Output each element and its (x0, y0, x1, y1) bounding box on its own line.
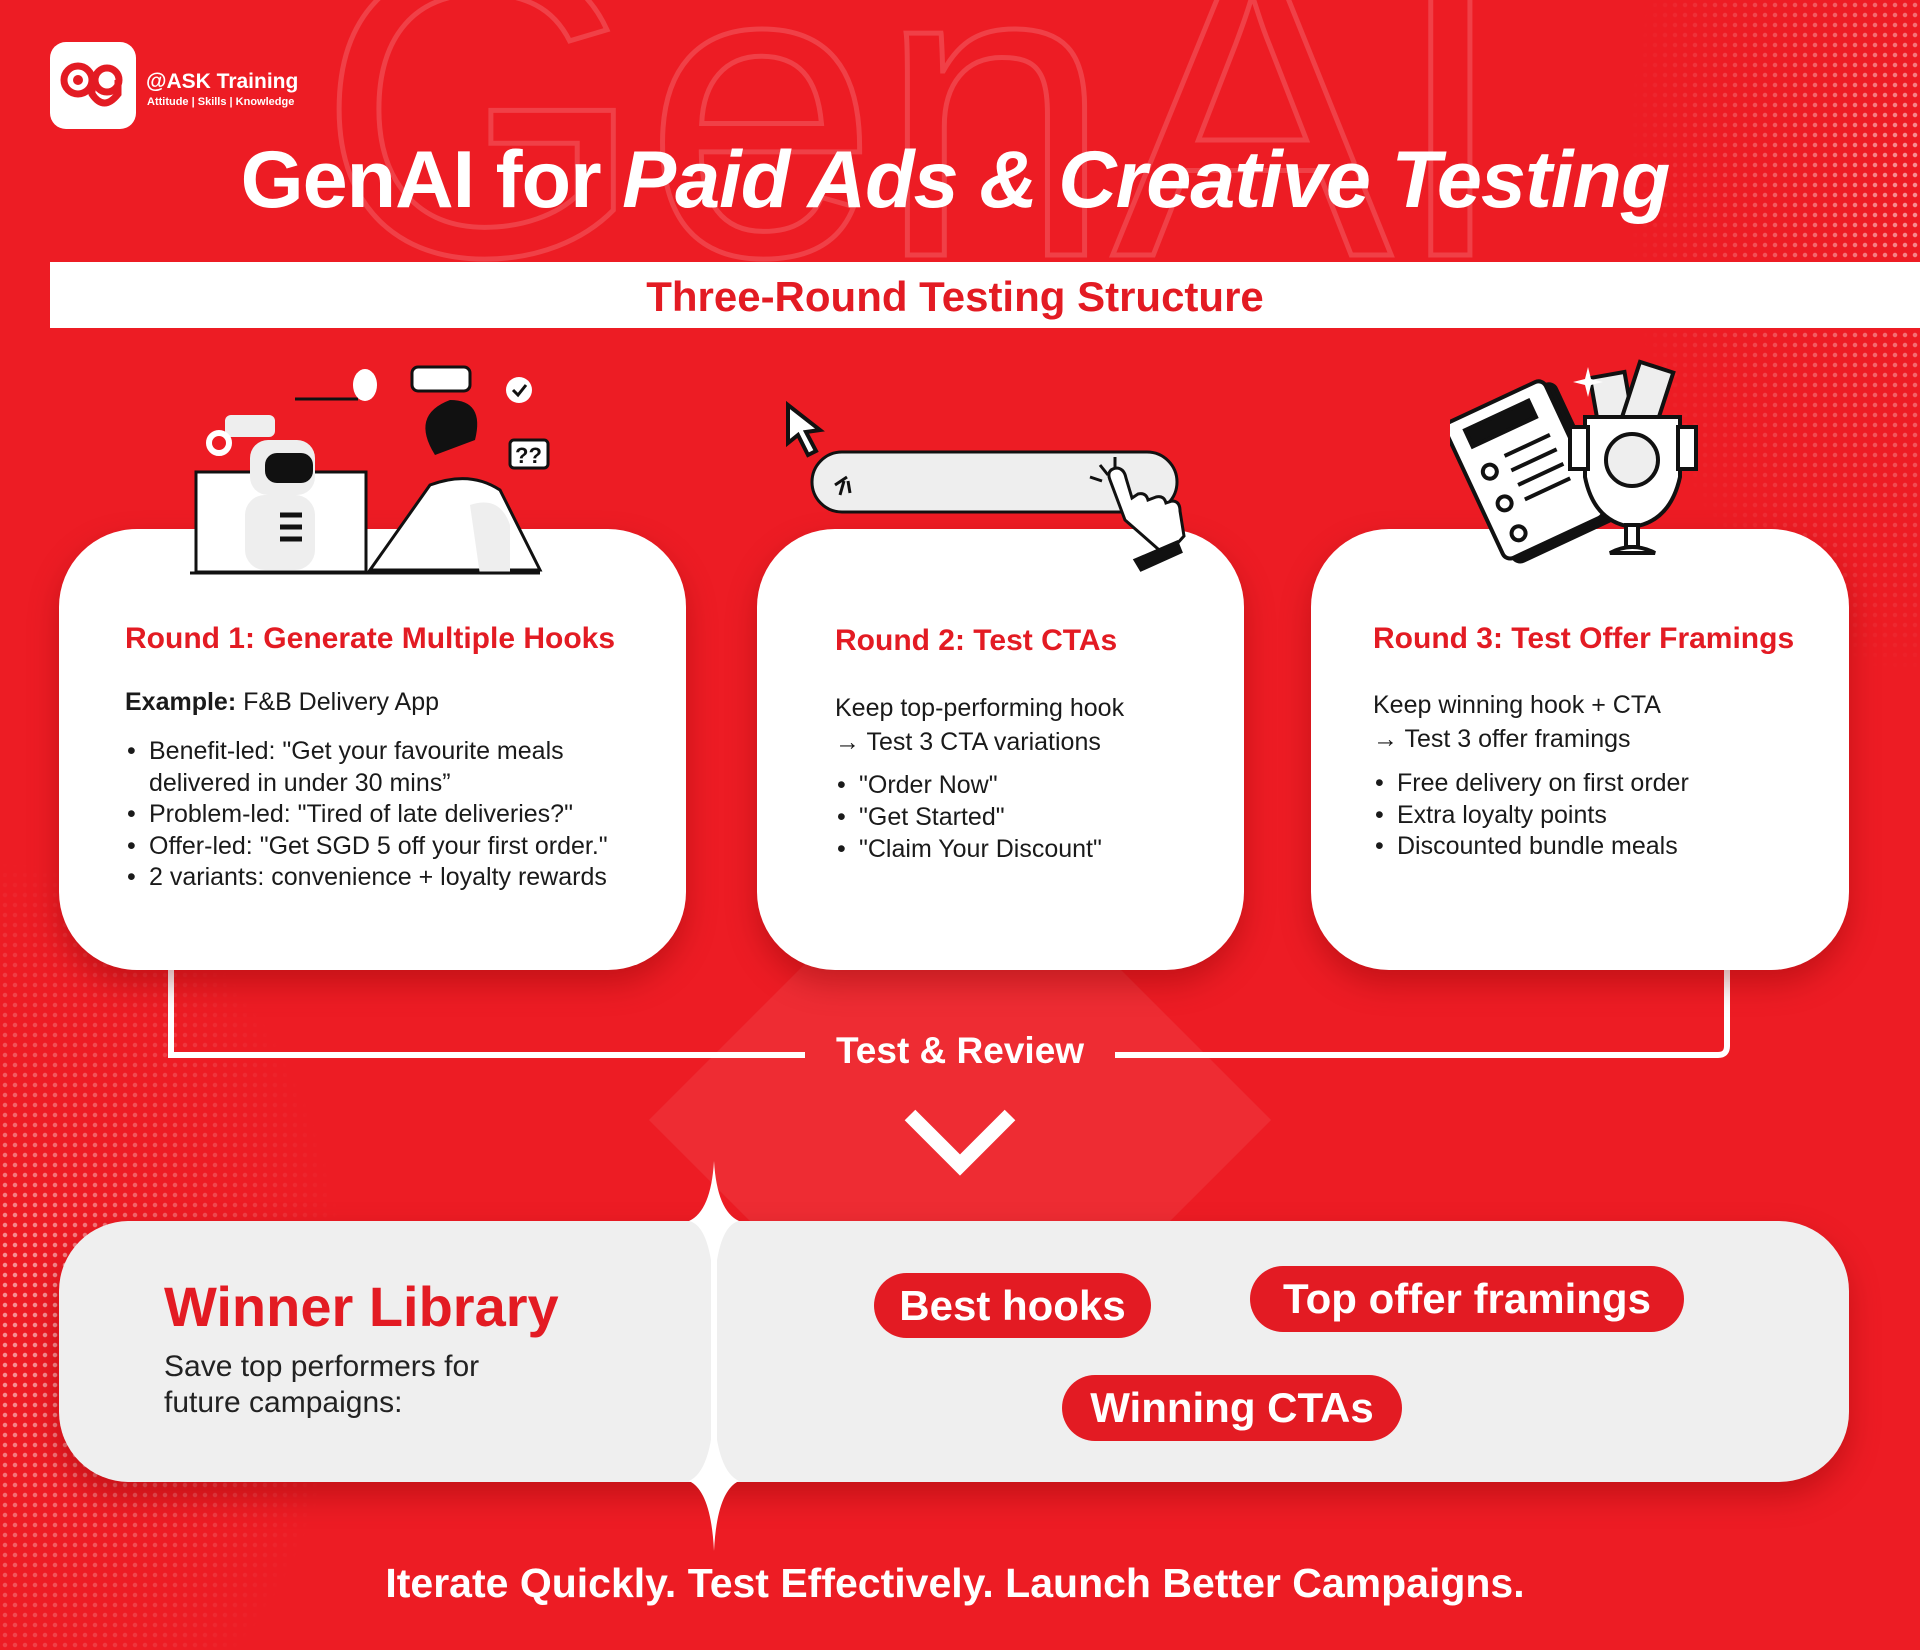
winner box background (59, 1221, 1849, 1482)
heading: winner library: Winner Library (164, 1275, 559, 1338)
text: round 2 body: "Get Started" (859, 803, 1005, 831)
text: round 1 body: Problem-led: "Tired of late deliveries?" (149, 800, 573, 828)
pill: top offer framings (1250, 1266, 1684, 1332)
illustration: robot and person (190, 366, 550, 575)
pill: top offer framings: Top offer framings (1283, 1275, 1651, 1322)
text: round 3 body: Free delivery on first order (1397, 769, 1689, 797)
pill: winning CTAs: Winning CTAs (1090, 1384, 1374, 1431)
text: round 2 body (835, 694, 1124, 863)
text: round 1 body (125, 688, 608, 891)
logo (50, 42, 298, 129)
text: round 3 body: Keep winning hook + CTA (1373, 691, 1661, 719)
icon: logo mark (50, 42, 136, 129)
logo: Attitude | Skills | Knowledge (147, 96, 294, 108)
panel: round 1 (59, 529, 686, 970)
heading: round 2: Round 2: Test CTAs (835, 624, 1117, 657)
text: round 3 body (1373, 691, 1689, 860)
bracket: test & review connector (168, 970, 1730, 1058)
text: round 2 body: Keep top-performing hook (835, 694, 1124, 722)
background halftone: top right (1653, 2, 1918, 637)
divider with sparkles (689, 1162, 739, 1550)
text: round 1 body: Benefit-led: "Get your favourite meals (149, 737, 564, 765)
text: winner library description: Save top performers for (164, 1350, 479, 1383)
text: round 3 body: Extra loyalty points (1397, 800, 1607, 828)
arrow: chevron down (904, 1110, 1016, 1176)
text: round 1 body: 2 variants: convenience + loyalty rewards (149, 863, 607, 891)
background halftone: bottom left (2, 893, 316, 1648)
background diamond highlight (649, 809, 1271, 1431)
heading: round 1: Round 1: Generate Multiple Hooks (125, 622, 615, 655)
text: round 1 body: Example: F&B Delivery App (125, 688, 439, 716)
illustration: clipboard and trophy (1450, 359, 1698, 564)
pill: best hooks (874, 1273, 1151, 1338)
text: round 2 body: "Order Now" (859, 771, 998, 799)
title: GenAI for Paid Ads & Creative Testing (241, 135, 1669, 225)
text: round 2 body: → Test 3 CTA variations (835, 728, 1101, 756)
panel: round 3 (1311, 529, 1849, 970)
subtitle banner (50, 262, 1920, 328)
brand text: @ASK Training (146, 70, 298, 93)
heading: round 3: Round 3: Test Offer Framings (1373, 622, 1794, 655)
pill: winning CTAs (1062, 1375, 1402, 1441)
text: round 3 body: → Test 3 offer framings (1373, 725, 1631, 753)
subtitle banner: Three-Round Testing Structure (646, 273, 1264, 320)
text: round 1 body: Offer-led: "Get SGD 5 off your first order." (149, 832, 608, 860)
heading: test & review: Test & Review (836, 1030, 1084, 1071)
text: winner library description: future campaigns: (164, 1386, 402, 1419)
text: winner library description (164, 1350, 479, 1419)
text: round 2 body: "Claim Your Discount" (859, 835, 1102, 863)
text: round 3 body: Discounted bundle meals (1397, 832, 1678, 860)
illustration: search bar with cursor and hand (786, 400, 1186, 572)
illustration: robot and person: ?? (515, 443, 542, 468)
panel: round 2 (757, 529, 1244, 970)
footer tagline: Iterate Quickly. Test Effectively. Launch Better Campaigns. (385, 1560, 1525, 1606)
panel: winner library (45, 1162, 1862, 1550)
pill: best hooks: Best hooks (899, 1282, 1126, 1329)
text: round 1 body: delivered in under 30 mins” (149, 768, 451, 796)
